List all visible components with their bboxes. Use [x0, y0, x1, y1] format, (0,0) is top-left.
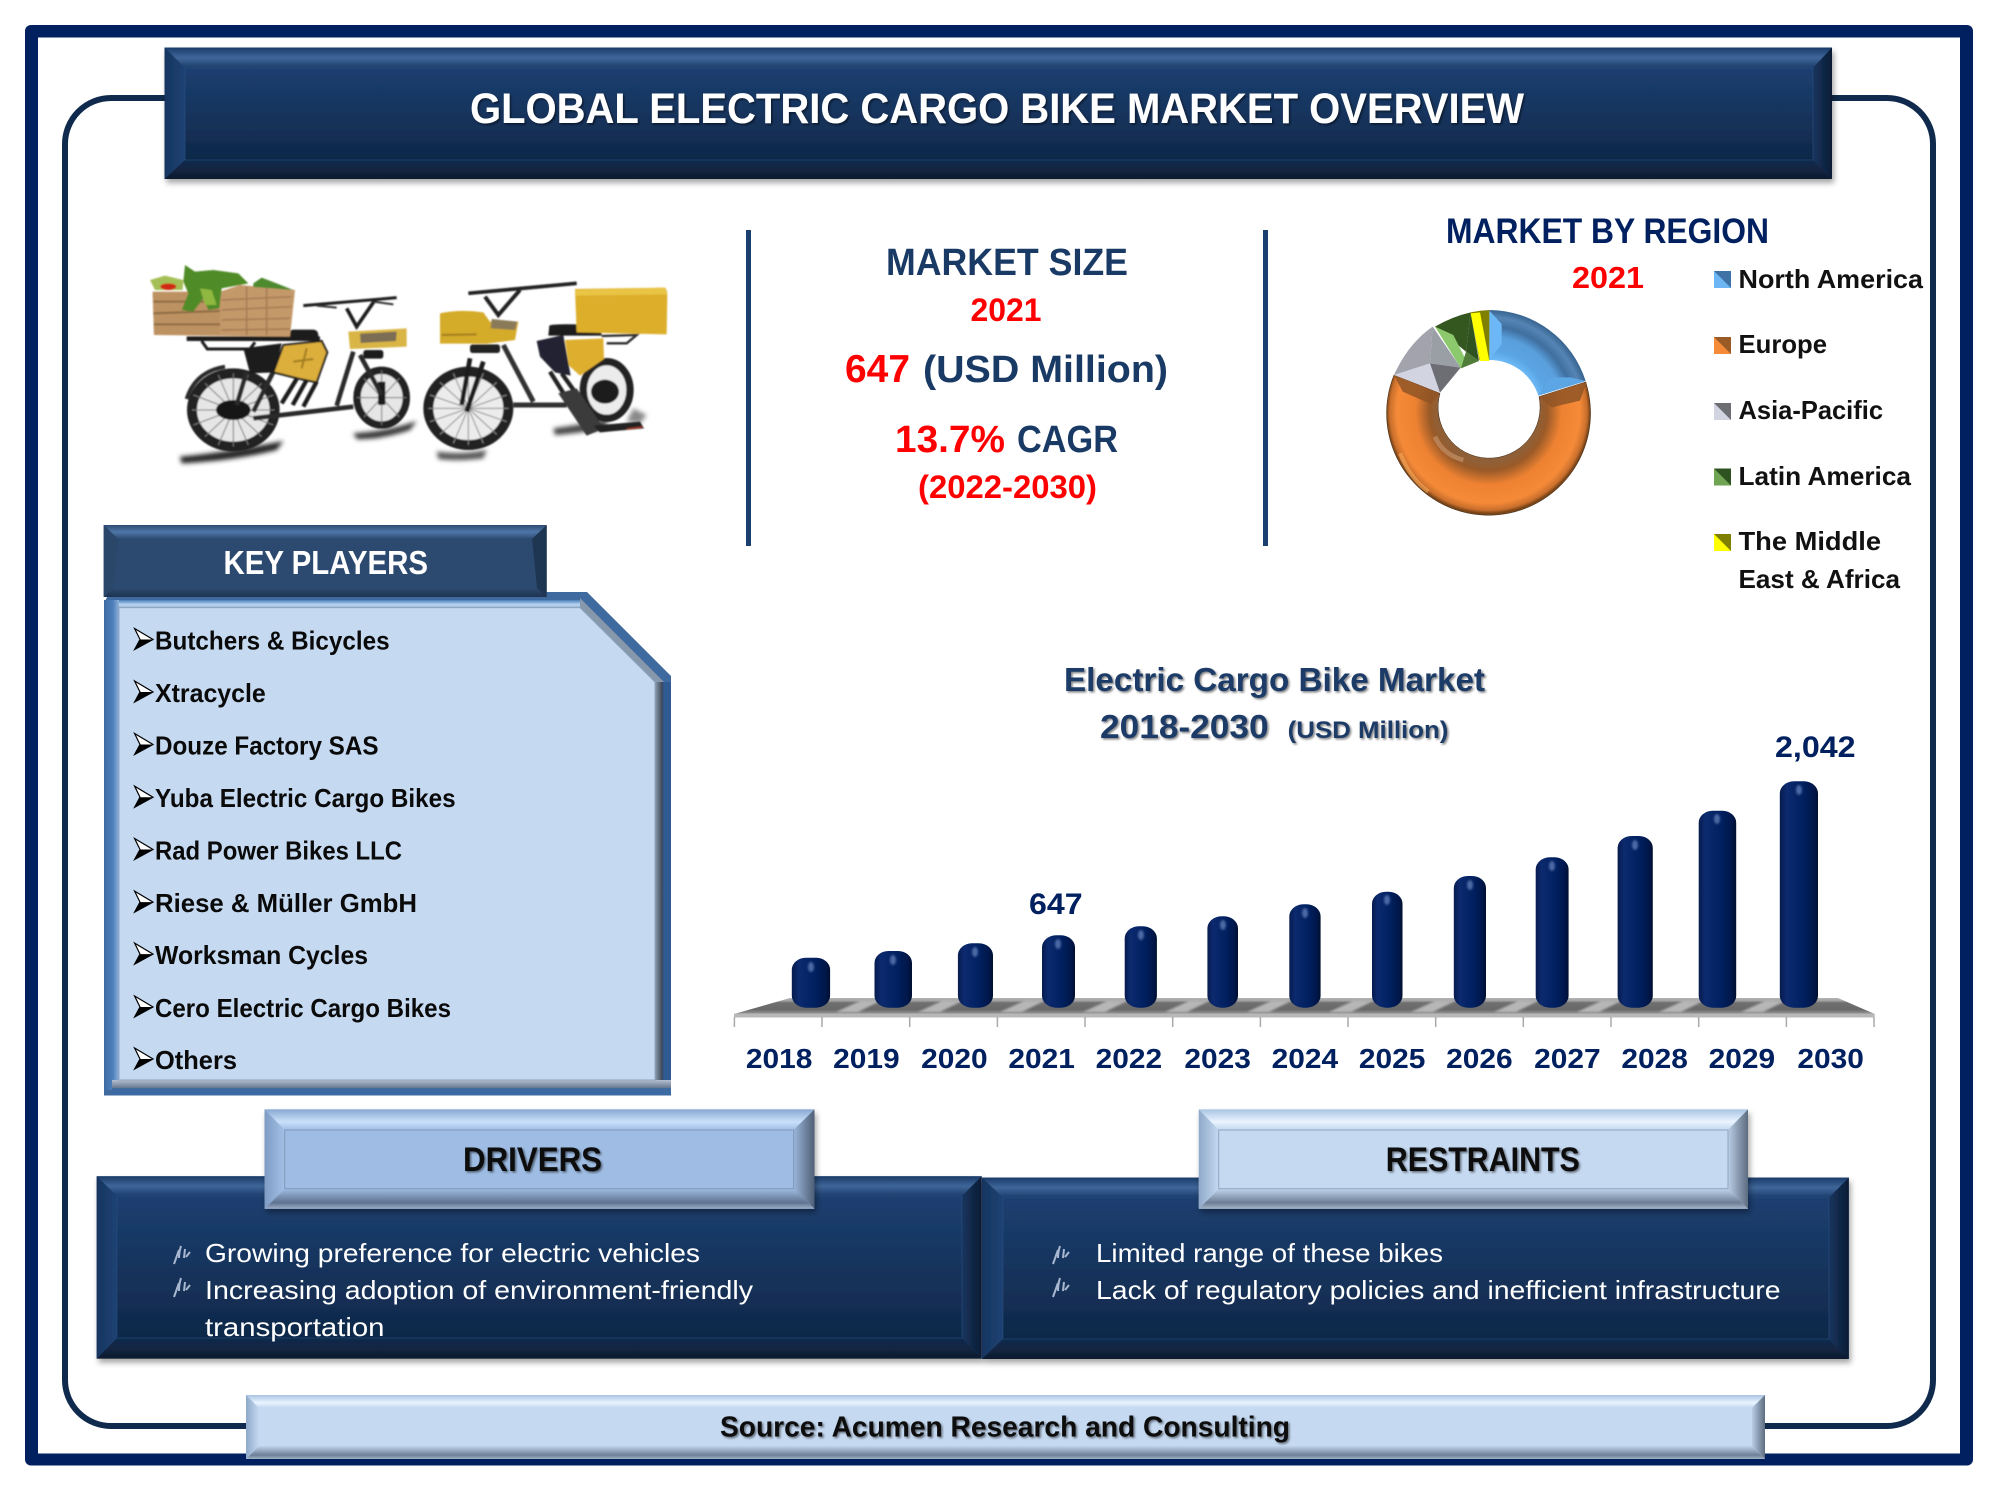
bar 2029	[1699, 811, 1736, 1008]
key players header	[104, 525, 547, 597]
legend item: Europe: Europe	[1738, 329, 1827, 359]
right bike	[428, 283, 667, 460]
cagr label: CAGR	[1017, 419, 1118, 461]
x axis labels	[746, 1043, 1864, 1074]
bar 2027	[1536, 857, 1569, 1008]
legend: regions	[1714, 264, 1924, 594]
list item: Others	[155, 1045, 237, 1075]
legend item: North America: North America	[1738, 264, 1924, 294]
legend item: Asia-Pacific: Asia-Pacific	[1738, 395, 1883, 425]
chart title	[1064, 661, 1485, 745]
restraints header	[1199, 1109, 1748, 1209]
slice: Middle East and Africa	[1471, 310, 1489, 361]
panel: drivers	[97, 1176, 982, 1359]
bar 2025	[1372, 892, 1402, 1008]
x axis labels: 2025	[1359, 1043, 1425, 1074]
market size heading: MARKET SIZE	[886, 242, 1128, 284]
x axis labels: 2026	[1446, 1043, 1513, 1074]
legend item: Latin America: Latin America	[1738, 461, 1912, 491]
title banner	[164, 48, 1832, 179]
donut chart: market by region	[1387, 310, 1591, 515]
list item: Rad Power Bikes LLC	[155, 836, 402, 866]
bar 2030	[1780, 781, 1818, 1008]
list item: Xtracycle	[155, 678, 266, 708]
market by region heading: MARKET BY REGION	[1446, 212, 1769, 251]
title text: GLOBAL ELECTRIC CARGO BIKE MARKET OVERVIEW	[470, 85, 1524, 133]
bar 2028	[1618, 836, 1653, 1008]
slice: North America	[1489, 310, 1586, 396]
drivers header	[264, 1109, 814, 1209]
chart title: (USD Million)	[1288, 717, 1448, 744]
bar chart	[734, 731, 1875, 1074]
list item: Riese & Müller GmbH	[155, 888, 417, 918]
chart title: Electric Cargo Bike Market	[1064, 661, 1485, 698]
slice: Asia-Pacific	[1394, 327, 1461, 393]
bar 2019	[874, 951, 912, 1008]
market size block	[845, 242, 1168, 505]
list item: Yuba Electric Cargo Bikes	[155, 783, 456, 813]
x axis labels: 2020	[921, 1043, 988, 1074]
source bar	[246, 1395, 1765, 1459]
slice: Latin America	[1435, 312, 1479, 368]
x axis labels: 2030	[1797, 1043, 1864, 1074]
x axis labels: 2028	[1621, 1043, 1688, 1074]
market size year: 2021	[970, 292, 1042, 328]
bar 2026	[1454, 876, 1486, 1008]
x axis labels: 2029	[1709, 1043, 1775, 1074]
x axis labels: 2021	[1008, 1043, 1075, 1074]
chart floor	[734, 998, 1875, 1027]
restraint item 1: Limited range of these bikes	[1096, 1238, 1443, 1268]
list item: Douze Factory SAS	[155, 730, 378, 760]
drivers header text: DRIVERS	[463, 1141, 602, 1179]
key players items	[135, 626, 456, 1075]
list item: Cero Electric Cargo Bikes	[155, 993, 451, 1023]
driver item 2: Increasing adoption of environment-friendly	[205, 1275, 753, 1305]
legend item: Middle East and Africa: East & Africa	[1738, 564, 1901, 594]
x axis labels: 2022	[1096, 1043, 1162, 1074]
legend item: Middle East and Africa: The Middle	[1738, 526, 1881, 556]
x axis labels: 2027	[1534, 1043, 1601, 1074]
divider right	[1263, 230, 1268, 546]
x axis labels: 2024	[1272, 1043, 1339, 1074]
market by region heading	[1446, 212, 1769, 295]
left bike	[150, 265, 417, 463]
slice: Europe	[1387, 375, 1591, 515]
cagr period: (2022-2030)	[918, 469, 1097, 505]
market size unit: (USD Million)	[923, 349, 1168, 391]
list item: Butchers & Bicycles	[155, 626, 390, 656]
data label 647: 647	[1029, 888, 1083, 921]
restraint item 2: Lack of regulatory policies and inefficient infrastructure	[1096, 1275, 1780, 1305]
x axis labels: 2023	[1184, 1043, 1251, 1074]
image: two electric cargo bikes	[150, 265, 667, 463]
region year: 2021	[1572, 260, 1644, 295]
cagr value: 13.7%	[895, 419, 1005, 461]
market size value: 647	[845, 348, 910, 391]
panel: restraints	[982, 1178, 1849, 1359]
bar 2020	[958, 943, 993, 1008]
x axis labels: 2019	[833, 1043, 900, 1074]
data label 2,042: 2,042	[1775, 731, 1856, 764]
legend item: Middle East and Africa	[1714, 526, 1901, 594]
bar 2024	[1289, 904, 1321, 1008]
driver item 1: Growing preference for electric vehicles	[205, 1238, 700, 1268]
x axis labels: 2018	[746, 1043, 812, 1074]
divider left	[746, 230, 751, 546]
source text: Source: Acumen Research and Consulting	[720, 1412, 1290, 1444]
bar 2022	[1125, 926, 1157, 1008]
chart title: 2018-2030	[1100, 708, 1269, 745]
driver item 2: transportation	[205, 1312, 384, 1342]
key players header text: KEY PLAYERS	[224, 544, 428, 581]
key players list panel	[104, 592, 671, 1096]
bar 2021	[1042, 935, 1075, 1008]
bar 2023	[1207, 916, 1238, 1008]
driver item 2	[174, 1275, 753, 1342]
list item: Worksman Cycles	[155, 940, 368, 970]
restraints header text: RESTRAINTS	[1386, 1141, 1580, 1179]
bar 2018	[792, 958, 830, 1008]
